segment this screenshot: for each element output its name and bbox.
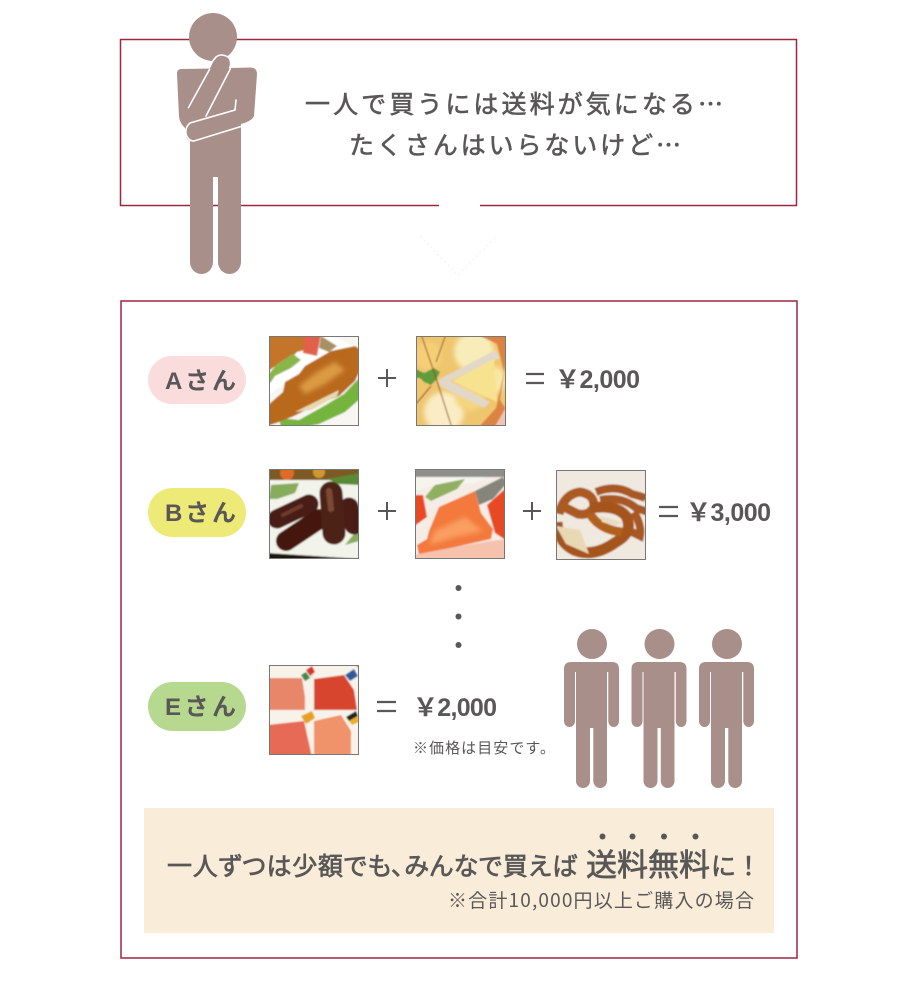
speech text: 一人で買うには送料が気になる… <box>305 85 723 121</box>
callout headline: 送料無料 <box>586 840 710 885</box>
icon: three people <box>564 629 754 788</box>
panel: speech box <box>120 40 796 206</box>
emphasis dots <box>600 834 698 840</box>
icon: equals <box>526 374 544 383</box>
speech text: たくさんはいらないけど… <box>349 126 681 162</box>
photo: croissant sandwich <box>270 337 358 425</box>
label: E-san: Eさん <box>165 694 236 721</box>
callout headline: に！ <box>711 847 761 883</box>
price: A-san: ￥2,000 <box>555 366 640 394</box>
row: E-san <box>148 663 555 758</box>
panel: order examples <box>121 301 797 958</box>
callout headline: 一人ずつは少額でも、みんなで買えば <box>167 847 578 883</box>
photo: fruit tart <box>417 337 505 425</box>
label: A-san: Aさん <box>165 368 236 395</box>
row: A-san <box>148 336 639 426</box>
note: order condition: ※合計10,000円以上ご購入の場合 <box>448 886 754 913</box>
infographic <box>120 13 798 959</box>
callout: free shipping <box>144 808 774 933</box>
icon: ellipsis dots <box>456 585 462 648</box>
note: price is a guide: ※価格は目安です。 <box>413 737 555 758</box>
photo: sausages <box>270 470 358 558</box>
frame: A-san photos <box>270 336 506 426</box>
icon: thinking person <box>177 13 257 274</box>
speech text <box>305 85 723 162</box>
frame: B-san photos <box>270 470 646 560</box>
arrow: faint chevron <box>420 236 497 275</box>
frame: E-san photo <box>270 666 358 754</box>
photo: prosciutto <box>270 666 358 754</box>
price: B-san: ￥3,000 <box>686 499 771 527</box>
photo: smoked salmon <box>416 470 504 558</box>
row: B-san <box>148 466 771 562</box>
label: B-san: Bさん <box>165 500 236 527</box>
icon: plus <box>523 502 541 520</box>
callout headline <box>167 840 761 885</box>
price: E-san: ￥2,000 <box>413 694 497 722</box>
icon: equals <box>659 507 678 516</box>
icon: plus <box>378 369 396 387</box>
label: A-san <box>148 356 246 404</box>
label: B-san <box>148 488 246 537</box>
label: E-san <box>148 682 246 731</box>
icon: plus <box>378 502 396 520</box>
icon: equals <box>377 702 396 711</box>
photo: pretzel <box>557 471 645 559</box>
